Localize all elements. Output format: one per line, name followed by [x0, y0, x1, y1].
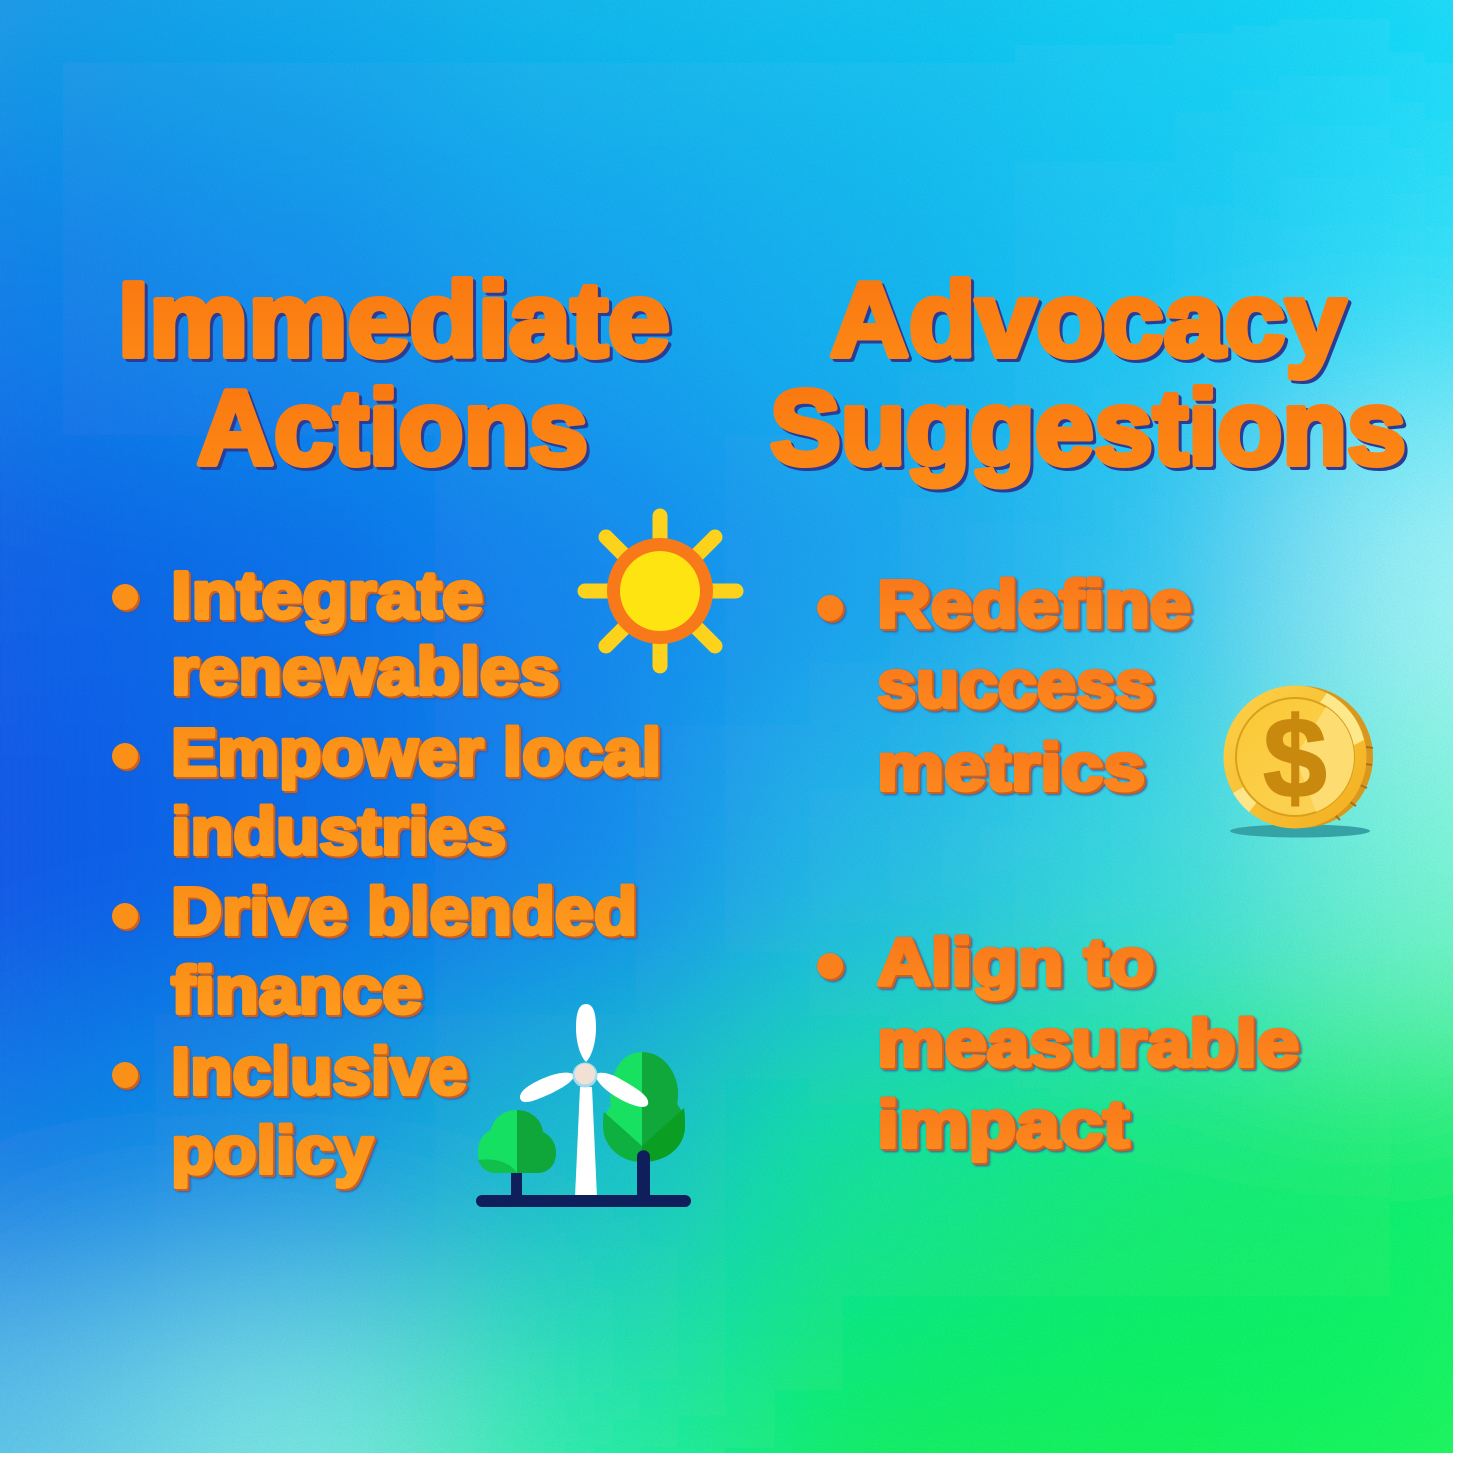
heading: immediate actions: Immediate — [118, 261, 670, 379]
icon: gold coin: $ — [1263, 695, 1327, 822]
bullet list: immediate actions: industries — [171, 794, 506, 869]
bullet list: advocacy suggestions: Align to — [877, 925, 1154, 1000]
left tree — [478, 1110, 556, 1198]
ground line — [476, 1195, 691, 1207]
bullet list: immediate actions: finance — [171, 953, 422, 1028]
bullet list: immediate actions: renewables — [171, 634, 559, 709]
icon: gold coin — [1224, 686, 1373, 838]
heading: advocacy suggestions — [770, 261, 1406, 487]
bullet list: advocacy suggestions: metrics — [877, 730, 1145, 805]
bullet list: immediate actions: Integrate — [171, 558, 483, 633]
heading: immediate actions: Actions — [197, 369, 588, 487]
heading: advocacy suggestions: Suggestions — [770, 369, 1406, 487]
bullet list: immediate actions: Empower local — [171, 715, 661, 790]
bullet list: advocacy suggestions: Redefine — [877, 567, 1191, 642]
icon: wind turbine and trees — [476, 1004, 691, 1207]
bullet list: immediate actions: policy — [171, 1113, 373, 1188]
right tree — [603, 1052, 685, 1197]
icon: sun — [585, 516, 736, 666]
bullet list: advocacy suggestions: impact — [877, 1087, 1129, 1162]
bullet list: advocacy suggestions: success — [877, 647, 1154, 722]
bullet list: immediate actions: Inclusive — [171, 1034, 467, 1109]
bullet list: immediate actions: Drive blended — [171, 874, 637, 949]
heading: advocacy suggestions: Advocacy — [830, 261, 1346, 379]
heading: immediate actions — [118, 261, 670, 487]
bullet list: advocacy suggestions: measurable — [877, 1006, 1299, 1081]
bullet list: advocacy suggestions — [817, 567, 1299, 1162]
panel: advocacy suggestions — [770, 261, 1406, 1162]
bullet list: immediate actions — [112, 558, 661, 1188]
panel: immediate actions — [112, 261, 736, 1207]
turbine — [520, 1004, 648, 1197]
